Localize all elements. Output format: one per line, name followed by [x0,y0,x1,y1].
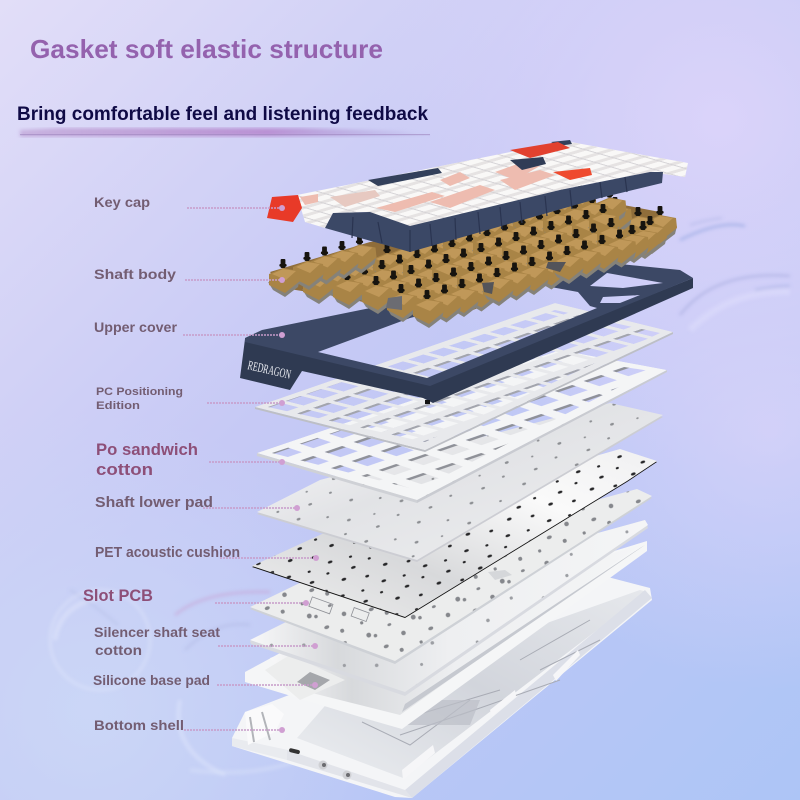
label: silencer shaft seat cotton: Silencer shaft seat [94,624,220,640]
title: Gasket soft elastic structure [30,34,383,64]
pink keycaps [300,163,555,212]
label: Po sandwich cotton: Po sandwich [96,440,198,459]
layer: Po sandwich cotton [257,350,667,503]
label: slot PCB: Slot PCB [83,587,153,605]
layer: key caps [267,140,688,252]
label: silencer shaft seat cotton: cotton [95,642,142,658]
subtitle: Bring comfortable feel and listening feedback [17,104,428,125]
layer: PET acoustic cushion [252,449,657,618]
label: upper cover: Upper cover [94,319,178,335]
navy front row [325,172,663,252]
label: shaft body: Shaft body [94,266,176,282]
label: key cap [94,194,285,211]
label: shaft lower pad: Shaft lower pad [95,494,213,511]
label: shaft lower pad [95,494,300,511]
label: silencer shaft seat cotton [94,624,318,658]
layer: bottom shell [232,575,652,798]
layer: shaft lower pad [257,403,663,562]
label: silicone base pad: Silicone base pad [93,672,210,688]
red key cap [267,195,302,222]
label: PC positioning edition: PC Positioning [96,386,183,398]
label: PET acoustic cushion: PET acoustic cushion [95,545,240,561]
label: PET acoustic cushion [95,545,319,561]
label: slot PCB [83,587,309,606]
dark keycaps [368,168,442,186]
label: key cap: Key cap [94,194,150,210]
label: silicone base pad [93,672,318,688]
subtitle underline [20,128,434,137]
label: shaft body [94,266,285,283]
label: bottom shell: Bottom shell [94,717,184,733]
layer: silencer shaft seat cotton [250,520,648,696]
label: bottom shell [94,717,285,733]
orange keycaps [510,142,570,158]
logo: REDRAGON: REDRAGON [246,357,293,382]
layer: upper cover frame [240,262,693,404]
layer: PC positioning edition [255,303,673,452]
label: Po sandwich cotton: cotton [96,460,153,479]
layer: silicone base pad [245,541,647,729]
layer: shaft body switches [268,184,677,328]
label: PC positioning edition [96,386,285,412]
layer: slot PCB [250,489,652,664]
label: PC positioning edition: Edition [96,400,140,412]
label: upper cover [94,319,285,338]
label: Po sandwich cotton [96,440,285,479]
